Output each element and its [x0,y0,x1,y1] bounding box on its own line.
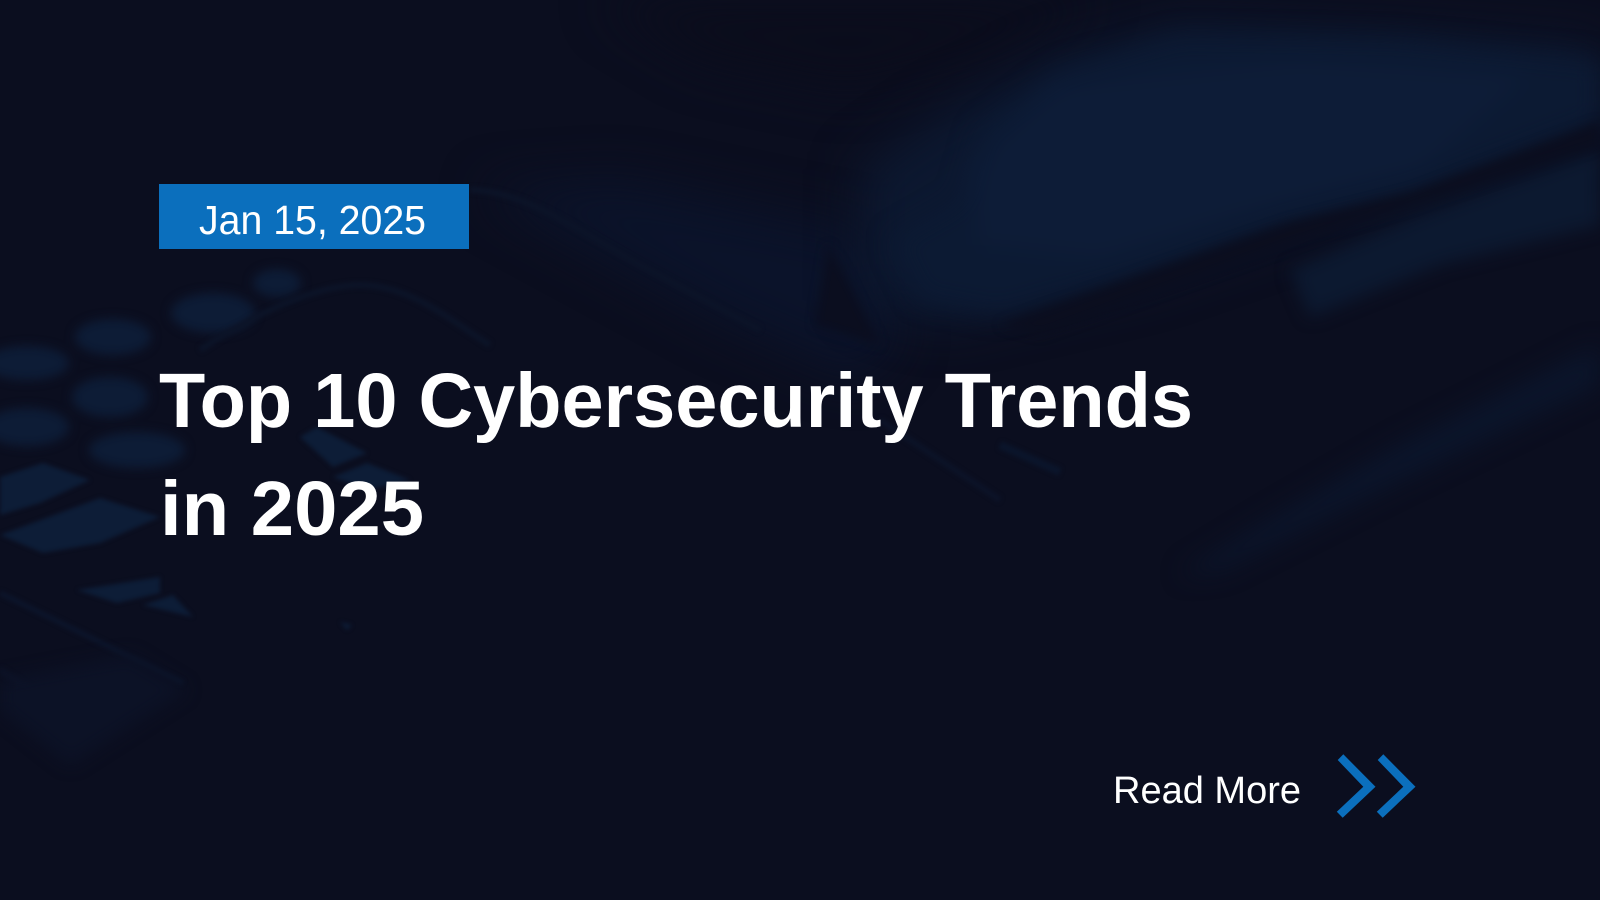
background: blurred cloud upper right [890,35,1600,315]
date badge [159,184,469,249]
background: keyboard keys left [0,269,301,468]
background: dark band under cloud [1000,122,1600,335]
background: laptop edge lines [0,190,1060,715]
background: streak lower right [1180,345,1600,575]
date badge: Jan 15, 2025 [199,197,426,243]
title: in 2025 [160,466,424,552]
background: soft outer cloud [860,25,1600,325]
background: lower left key [0,655,187,765]
background: darker top edge [600,0,1100,90]
read more link: Read More [1113,770,1301,812]
icon: double chevron arrow [1337,754,1416,818]
background: cloud lower section [1290,150,1600,317]
read more link [1113,754,1416,818]
title [159,358,1193,552]
background: dark spike [815,245,880,345]
background: faint diagonal band [480,180,900,380]
background: flat keys left [0,427,410,630]
title: Top 10 Cybersecurity Trends [159,358,1193,444]
